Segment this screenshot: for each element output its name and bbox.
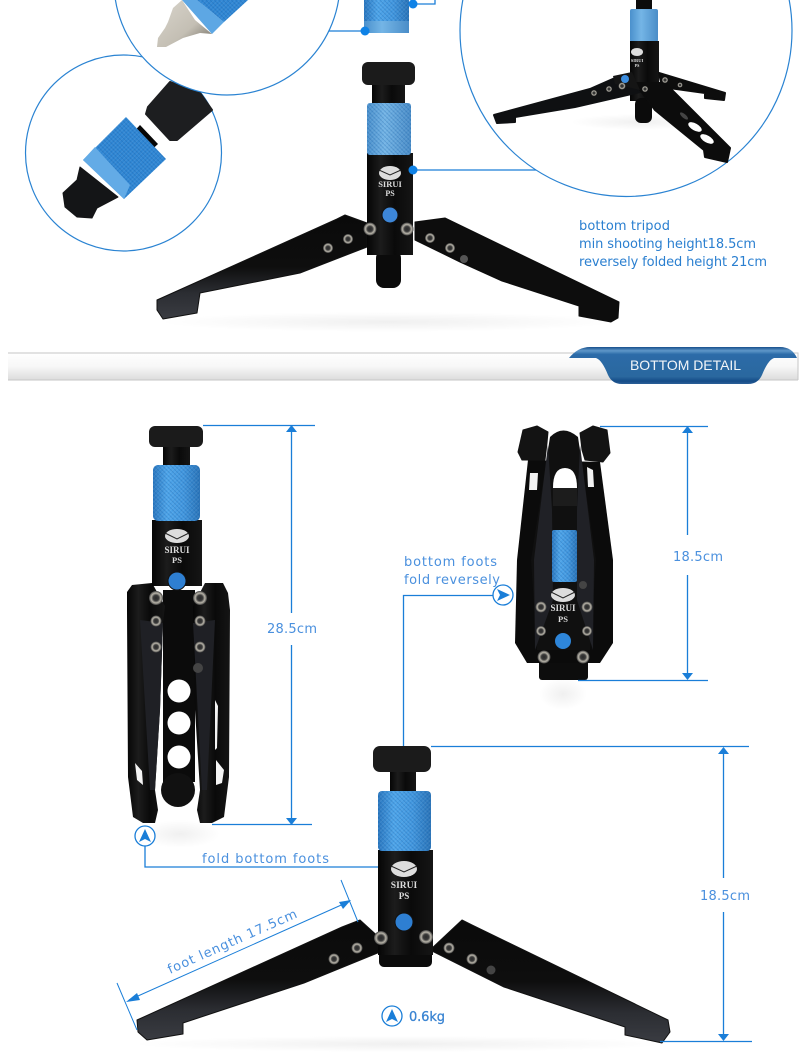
photo: reversely folded tripod: [515, 426, 613, 710]
text: bottom tripod specs: [579, 219, 767, 270]
callout: bottom foots fold reversely: fold reversely: [404, 573, 500, 588]
dimension: folded height 28.5cm: 28.5cm: [267, 622, 317, 637]
callout: bottom foots fold reversely: bottom foots: [404, 555, 497, 570]
text: bottom tripod specs: bottom tripod: [579, 219, 670, 234]
photo: folded tripod: [127, 426, 230, 848]
callout: fold bottom foots: [135, 826, 378, 867]
photo: open tripod with dimensions base: SIRUI: [391, 881, 417, 891]
tripod column stub at top edge: [360, 0, 418, 36]
dimension: reversed height 18.5cm: 18.5cm: [673, 550, 723, 565]
dimension: reversed height 18.5cm: [578, 426, 723, 680]
section header band: BOTTOM DETAIL: [630, 357, 741, 373]
connector lines and dots to detail circles: [329, 0, 536, 170]
weight: 0.6kg: 0.6kg: [409, 1010, 445, 1025]
detail circle: mini tripod: [460, 0, 792, 196]
photo: folded tripod: PS: [172, 555, 182, 565]
photo: bottom tripod: PS: [385, 189, 395, 198]
dimension: foot length 17.5cm: [117, 880, 358, 1030]
photo: bottom tripod: [157, 62, 619, 332]
detail circle: spike foot: [114, 0, 340, 95]
callout: fold bottom foots: fold bottom foots: [202, 852, 329, 867]
photo: open tripod with dimensions base: PS: [399, 891, 409, 901]
photo: reversely folded tripod: PS: [558, 614, 568, 624]
weight: 0.6kg: [382, 1006, 445, 1026]
photo: bottom tripod: SIRUI: [378, 179, 402, 189]
text: bottom tripod specs: min shooting height18.5cm: [579, 237, 756, 252]
dimension: foot length 17.5cm: foot length 17.5cm: [166, 907, 300, 978]
photo: open tripod with dimensions base: [130, 746, 670, 1052]
section header band: [8, 347, 798, 384]
detail circle: quick release plug: [26, 55, 222, 251]
callout: bottom foots fold reversely: [404, 555, 513, 746]
detail circle: mini tripod: PS: [635, 63, 640, 68]
detail circle: mini tripod: SIRUI: [631, 58, 643, 63]
dimension: tripod height 18.5cm: 18.5cm: [700, 889, 750, 904]
photo: folded tripod: SIRUI: [164, 545, 190, 555]
photo: reversely folded tripod: SIRUI: [550, 603, 576, 613]
text: bottom tripod specs: reversely folded height 21cm: [579, 255, 767, 270]
dimension: folded height 28.5cm: [203, 425, 317, 825]
dimension: tripod height 18.5cm: [431, 746, 752, 1042]
